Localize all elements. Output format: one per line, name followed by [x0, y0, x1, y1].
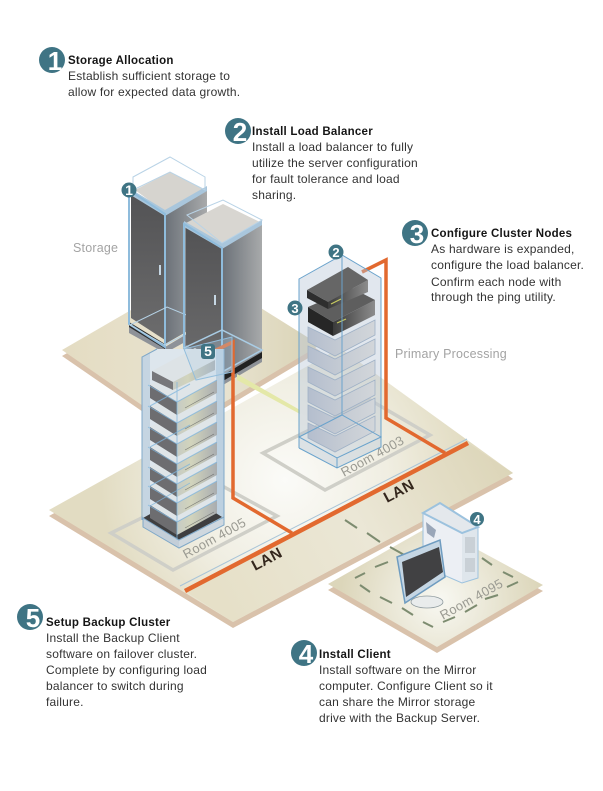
step 3: configure cluster nodes: configure the load balancer. — [431, 258, 584, 272]
step 3: configure cluster nodes: 3 — [410, 219, 424, 249]
small badge: 2: 2 — [332, 245, 340, 260]
step 2: install load balancer: for fault tolerance and load — [252, 172, 400, 186]
step 3: configure cluster nodes — [402, 219, 584, 304]
label: primary processing: Primary Processing — [395, 347, 507, 361]
step 2: install load balancer — [225, 117, 418, 202]
room outline: 4005 — [111, 482, 277, 570]
step 5: setup backup cluster: software on failover cluster. — [46, 647, 197, 661]
step 4: install client — [291, 639, 493, 725]
small badge: 5: 5 — [204, 343, 212, 359]
small badge: 4 — [470, 512, 484, 527]
step 5: setup backup cluster: 5 — [26, 603, 40, 633]
step 5: setup backup cluster: balancer to switch during — [46, 679, 184, 693]
LAN label upper: LAN — [381, 476, 417, 507]
step 3: configure cluster nodes: Confirm each node with — [431, 275, 561, 289]
step 2: install load balancer: sharing. — [252, 188, 296, 202]
step 1: storage allocation: Establish sufficient storage to — [68, 69, 230, 83]
small badge: 2 — [328, 244, 344, 260]
floor: room 4095 — [328, 525, 543, 653]
client computer — [397, 503, 478, 608]
floor: storage room — [62, 270, 320, 436]
step 2: install load balancer: Install Load Balancer — [252, 126, 373, 138]
step 5: setup backup cluster — [17, 603, 207, 709]
ghost servers — [308, 320, 375, 452]
step 4: install client: can share the Mirror storage — [319, 695, 475, 709]
room label 4005: Room 4005 — [180, 515, 249, 562]
room label 4095: Room 4095 — [437, 576, 506, 623]
base — [143, 494, 224, 548]
server units — [150, 348, 217, 535]
step 4: install client: drive with the Backup Server. — [319, 711, 480, 725]
step 1: storage allocation: 1 — [48, 46, 62, 76]
step 5: setup backup cluster: Install the Backup Client — [46, 631, 180, 645]
step 4: install client: computer. Configure Client so it — [319, 679, 493, 693]
LAN edge line — [180, 439, 467, 586]
small badge: 3: 3 — [291, 301, 299, 316]
storage cabinet 2 — [183, 200, 262, 385]
small badge: 1: 1 — [125, 182, 133, 198]
primary processing rack — [299, 255, 381, 468]
step 3: configure cluster nodes: through the ping utility. — [431, 290, 556, 304]
LAN label lower: LAN — [249, 544, 285, 575]
step 1: storage allocation: Storage Allocation — [68, 55, 174, 67]
step 1: storage allocation: allow for expected data growth. — [68, 85, 240, 99]
step 5: setup backup cluster: Complete by configuring load — [46, 663, 207, 677]
small badge: 3 — [288, 300, 302, 316]
step 4: install client: Install Client — [319, 649, 391, 661]
step 5: setup backup cluster: failure. — [46, 695, 84, 709]
storage cabinet 1 — [129, 157, 207, 353]
step 3: configure cluster nodes: As hardware is expanded, — [431, 242, 575, 256]
small badge: 4: 4 — [473, 512, 481, 527]
black server: load balancer — [307, 267, 368, 309]
tower — [423, 503, 478, 583]
cable to primary processing — [362, 260, 445, 453]
status link cable — [237, 374, 300, 414]
step 4: install client: 4 — [299, 639, 314, 669]
room label 4003: Room 4003 — [338, 433, 407, 480]
monitor — [397, 540, 445, 603]
label: storage: Storage — [73, 241, 118, 255]
LAN backbone cable — [185, 443, 468, 591]
step 2: install load balancer: Install a load balancer to fully — [252, 140, 413, 154]
step 5: setup backup cluster: Setup Backup Cluster — [46, 617, 171, 629]
black server: cluster node — [308, 288, 375, 336]
small badge: 1 — [122, 182, 136, 198]
stand — [411, 596, 443, 608]
backup cluster rack — [142, 337, 232, 548]
floor: main server room — [49, 348, 513, 628]
small badge: 5 — [201, 343, 215, 359]
dashed room outline: 4095 — [345, 520, 518, 627]
room outline: 4003 — [263, 400, 430, 490]
step 1: storage allocation — [39, 46, 240, 99]
step 3: configure cluster nodes: Configure Cluster Nodes — [431, 228, 572, 240]
step 2: install load balancer: utilize the server configuration — [252, 156, 418, 170]
step 4: install client: Install software on the Mirror — [319, 663, 476, 677]
cable to backup cluster — [214, 342, 292, 533]
step 2: install load balancer: 2 — [233, 117, 247, 147]
